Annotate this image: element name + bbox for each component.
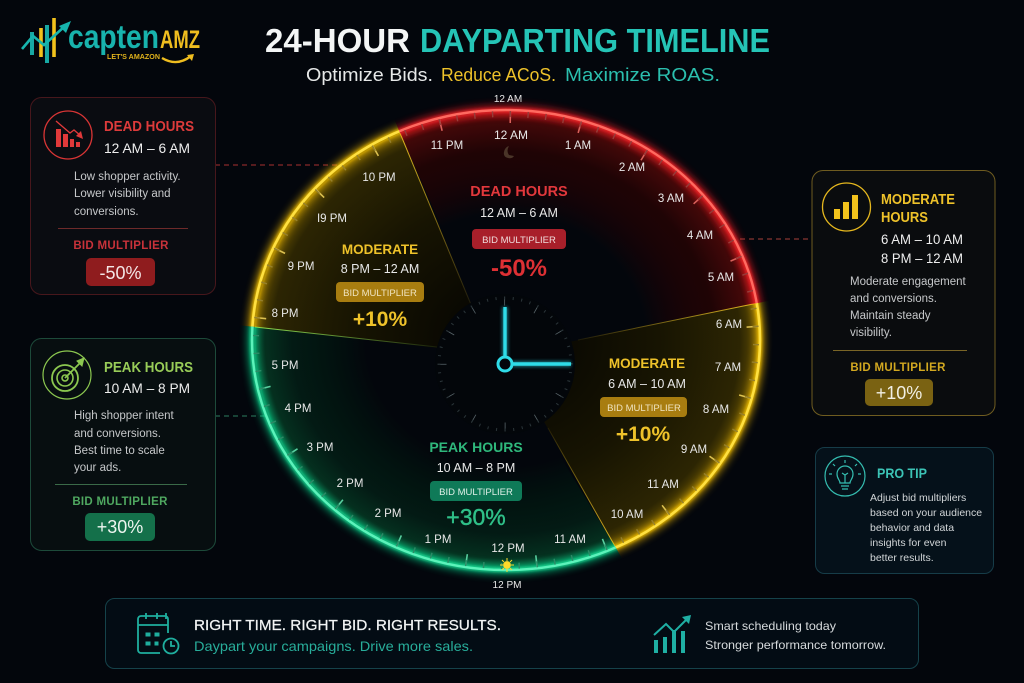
- title: [265, 22, 770, 59]
- zone label: dead hours: -50%: [491, 255, 547, 282]
- hour labels: 8 PM: [272, 308, 298, 320]
- description: Moderate engagement: [850, 276, 967, 288]
- zone label: moderate morning: +10%: [616, 423, 670, 446]
- subtitle: Reduce ACoS.: [441, 65, 556, 85]
- description: Best time to scale: [74, 445, 165, 457]
- zone label: dead hours: 12 AM – 6 AM: [480, 206, 558, 220]
- hour labels: I9 PM: [317, 213, 347, 225]
- ring: green arc: [242, 326, 620, 580]
- heading: PEAK HOURS: [104, 360, 193, 376]
- ring: red arc: [396, 99, 767, 305]
- description: Adjust bid multipliers: [870, 492, 966, 504]
- title: 24-HOUR: [265, 22, 410, 59]
- logo: captenAMZ: LET'S AMAZON: [107, 54, 160, 61]
- wedge: dead hours: [400, 111, 758, 354]
- heading: PRO TIP: [877, 465, 927, 481]
- zone label: peak hours: +30%: [446, 504, 506, 530]
- hour labels: 12 PM: [491, 543, 525, 555]
- heading: HOURS: [881, 210, 928, 226]
- time ranges: 8 PM – 12 AM: [881, 251, 963, 266]
- hour labels: 5 PM: [272, 360, 298, 372]
- icon: moon: [504, 146, 514, 158]
- hour labels: 11 AM: [554, 534, 586, 546]
- zone label: moderate morning: MODERATE: [609, 356, 685, 371]
- wedge: moderate morning: [506, 303, 761, 548]
- icon: target: [43, 351, 91, 399]
- description: Lower visibility and: [74, 188, 171, 200]
- heading: [881, 192, 955, 226]
- hour labels: 9 AM: [681, 444, 707, 456]
- description: insights for even: [870, 537, 947, 549]
- subtitle: Optimize Bids.: [306, 65, 433, 85]
- zone label: moderate morning: [600, 356, 687, 446]
- description: [74, 410, 175, 474]
- description: visibility.: [850, 327, 892, 339]
- bid multiplier value: [85, 513, 155, 541]
- bid multiplier value: [86, 258, 155, 286]
- clock hands: [498, 307, 571, 371]
- hour labels: 2 AM: [619, 162, 645, 174]
- zone label: moderate evening: BID MULTIPLIER: [343, 288, 417, 299]
- connector: dead hours: [215, 164, 342, 166]
- hour labels: 11 PM: [431, 140, 463, 152]
- bid multiplier value: +10%: [876, 383, 922, 403]
- description: Maintain steady: [850, 310, 931, 322]
- title: DAYPARTING TIMELINE: [420, 22, 770, 59]
- zone label: moderate morning: BID MULTIPLIER: [607, 403, 681, 414]
- banner side note: Stronger performance tomorrow.: [705, 638, 886, 652]
- bid multiplier value: +30%: [97, 517, 143, 537]
- description: based on your audience: [870, 507, 982, 519]
- description: behavior and data: [870, 522, 954, 534]
- hour labels: 2 PM: [375, 508, 401, 520]
- hour labels: 12 AM: [494, 128, 528, 142]
- bid multiplier value: -50%: [99, 263, 142, 283]
- panel: dead hours: [30, 98, 216, 294]
- zone label: peak hours: 10 AM – 8 PM: [437, 461, 515, 475]
- description: better results.: [870, 552, 934, 564]
- zone label: peak hours: [429, 439, 523, 530]
- bottom banner: [106, 598, 918, 668]
- zone label: moderate morning: 6 AM – 10 AM: [608, 377, 686, 391]
- zone label: moderate evening: 8 PM – 12 AM: [341, 262, 419, 276]
- description: your ads.: [74, 462, 121, 474]
- hour labels: 8 AM: [703, 404, 729, 416]
- time ranges: [881, 232, 963, 266]
- description: [850, 276, 967, 339]
- hour labels: 4 AM: [687, 230, 713, 242]
- description: conversions.: [74, 206, 139, 218]
- hour labels: 7 AM: [715, 362, 741, 374]
- hour labels: 6 AM: [716, 319, 742, 331]
- description: [870, 492, 982, 564]
- logo: captenAMZ: capten: [68, 18, 159, 55]
- description: Low shopper activity.: [74, 171, 181, 183]
- zone label: moderate evening: +10%: [353, 308, 407, 331]
- ring: yellow arc left: [242, 122, 402, 328]
- banner side note: Smart scheduling today: [705, 619, 836, 633]
- heading: DEAD HOURS: [104, 119, 194, 135]
- panel: pro tip: [816, 448, 994, 574]
- zone label: dead hours: BID MULTIPLIER: [482, 235, 556, 246]
- connector: moderate hours: [740, 238, 812, 240]
- zone label: dead hours: DEAD HOURS: [470, 184, 568, 200]
- hour labels: 1 AM: [565, 140, 591, 152]
- hour labels: 3 PM: [307, 442, 333, 454]
- bid multiplier value: [865, 379, 933, 406]
- hour labels: 5 AM: [708, 272, 734, 284]
- panel: moderate hours: [812, 170, 995, 416]
- dayparting clock dial: [252, 94, 761, 591]
- ring: yellow arc right: [612, 302, 770, 556]
- hour labels: 1 PM: [425, 534, 451, 546]
- icon: falling bars: [44, 111, 92, 159]
- hour labels: 9 PM: [288, 261, 314, 273]
- hour labels: 12 PM: [493, 580, 521, 591]
- description: High shopper intent: [74, 410, 175, 422]
- subtitle: [306, 65, 720, 85]
- hour labels: 4 PM: [285, 403, 311, 415]
- logo: captenAMZ: AMZ: [160, 26, 200, 54]
- logo: captenAMZ: [22, 18, 200, 63]
- subtitle: Maximize ROAS.: [565, 65, 720, 85]
- zone label: moderate evening: MODERATE: [342, 242, 418, 257]
- panel: peak hours: [30, 338, 216, 550]
- bid multiplier label: BID MULTIPLIER: [72, 496, 168, 508]
- heading: MODERATE: [881, 192, 955, 208]
- wedge divider lines: [255, 133, 758, 548]
- banner headline: RIGHT TIME. RIGHT BID. RIGHT RESULTS.: [194, 617, 501, 634]
- wedge: moderate evening: [255, 133, 491, 354]
- inner clock face: [435, 294, 575, 434]
- hour labels: 11 AM: [647, 479, 679, 491]
- time range: 12 AM – 6 AM: [104, 140, 190, 156]
- hour labels: [272, 94, 742, 591]
- hour labels: 10 PM: [362, 172, 396, 184]
- bid multiplier label: BID MULTIPLIER: [73, 240, 169, 252]
- icon: light bulb: [825, 456, 865, 496]
- time range: 10 AM – 8 PM: [104, 380, 190, 396]
- zone label: peak hours: PEAK HOURS: [429, 439, 523, 455]
- banner side note: [705, 619, 886, 652]
- zone label: moderate evening: [336, 242, 424, 331]
- icon: calendar with clock: [138, 613, 178, 654]
- icon: growth chart: [654, 615, 691, 653]
- icon: sun: [500, 558, 514, 572]
- zone label: peak hours: BID MULTIPLIER: [439, 487, 513, 498]
- wedge: peak hours: [255, 327, 616, 570]
- connector: peak hours: [215, 415, 268, 417]
- bid multiplier label: BID MULTIPLIER: [850, 362, 946, 374]
- description: and conversions.: [850, 293, 937, 305]
- description: and conversions.: [74, 428, 161, 440]
- icon: rising bars: [822, 183, 870, 231]
- hour labels: 10 AM: [611, 509, 643, 521]
- time ranges: 6 AM – 10 AM: [881, 232, 963, 247]
- banner subline: Daypart your campaigns. Drive more sales.: [194, 638, 473, 654]
- description: [74, 171, 181, 218]
- hour labels: 12 AM: [494, 94, 522, 105]
- zone label: dead hours: [470, 184, 568, 282]
- hour labels: 3 AM: [658, 193, 684, 205]
- hour labels: 2 PM: [337, 478, 363, 490]
